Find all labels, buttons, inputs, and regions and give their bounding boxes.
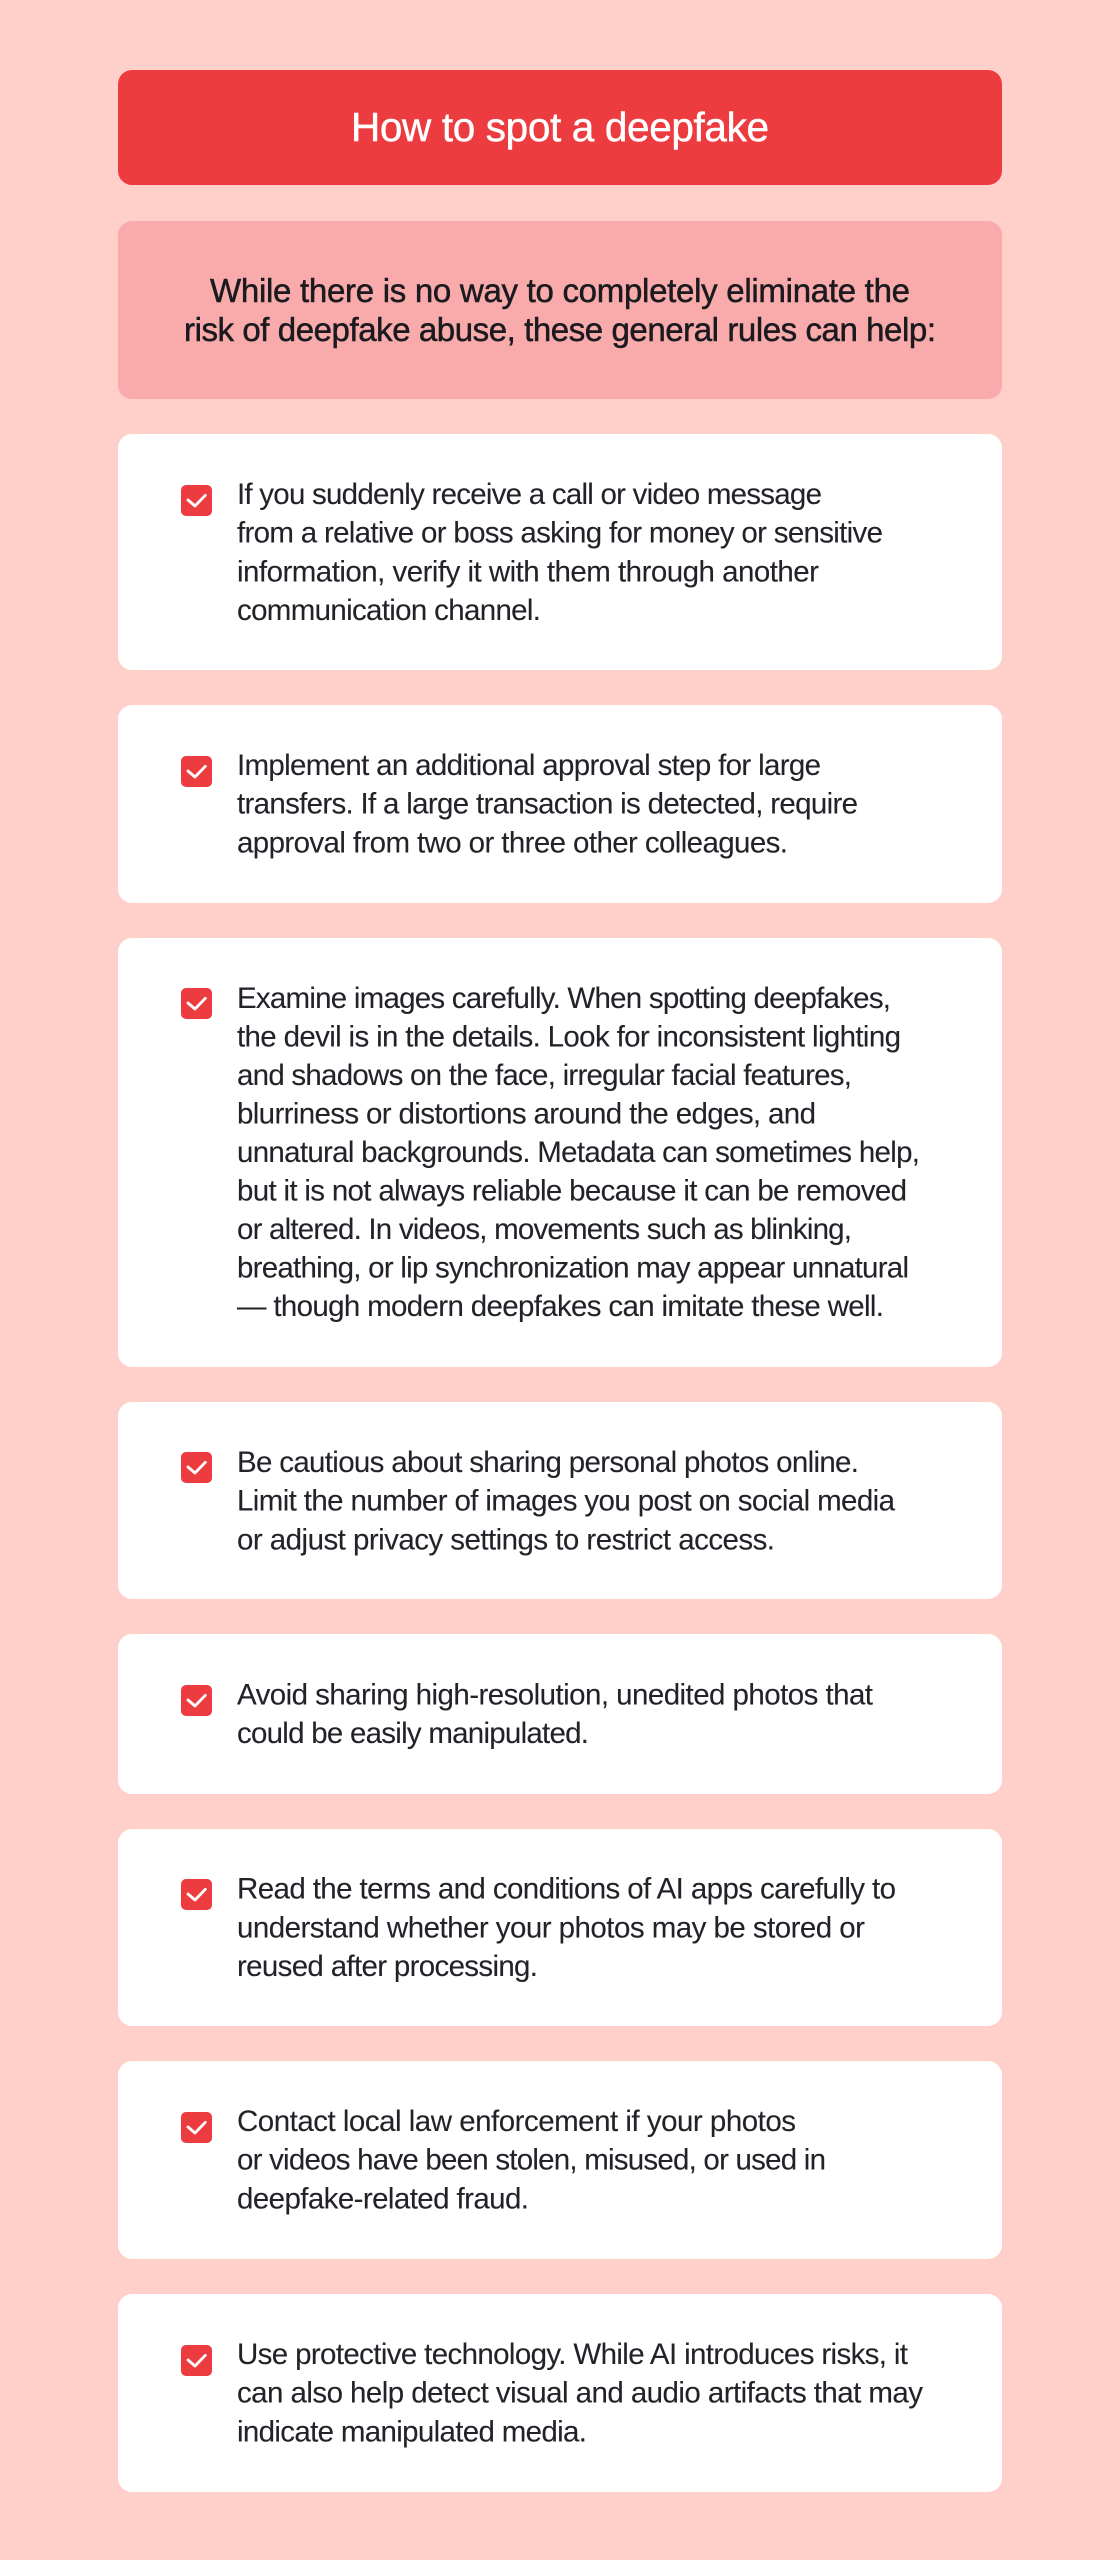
card 4: sharing photos: [118, 1402, 1002, 1599]
card 8 text: [237, 2338, 923, 2448]
card 3 text: and shadows on the face, irregular facial features,: [237, 1059, 852, 1092]
card 4 text: or adjust privacy settings to restrict access.: [237, 1523, 775, 1556]
icon: checkbox: [181, 2112, 212, 2143]
card 8 text: indicate manipulated media.: [237, 2415, 587, 2448]
card 8 text: can also help detect visual and audio artifacts that may: [237, 2377, 923, 2410]
card 1 text: [237, 478, 883, 627]
intro panel: While there is no way to completely eliminate the: [210, 272, 910, 309]
card 2 text: approval from two or three other colleagues.: [237, 826, 788, 859]
card 3 text: the devil is in the details. Look for inconsistent lighting: [237, 1020, 901, 1054]
card 1 text: communication channel.: [237, 594, 541, 627]
card 8: protective technology: [118, 2294, 1002, 2492]
card 5: high-resolution photos: [118, 1634, 1002, 1794]
card 5 text: could be easily manipulated.: [237, 1717, 589, 1750]
card 2 text: [237, 749, 858, 859]
card 3 text: — though modern deepfakes can imitate these well.: [237, 1290, 884, 1323]
card 7 text: Contact local law enforcement if your photos: [237, 2105, 796, 2138]
card 3 text: blurriness or distortions around the edges, and: [237, 1098, 816, 1130]
card 1 text: If you suddenly receive a call or video message: [237, 478, 822, 511]
card 3 text: breathing, or lip synchronization may appear unnatural: [237, 1252, 909, 1284]
title banner: How to spot a deepfake: [351, 104, 769, 150]
icon: checkbox: [181, 988, 212, 1019]
title banner: [118, 70, 1002, 185]
card 6: terms and conditions: [118, 1829, 1002, 2026]
card 3 text: but it is not always reliable because it can be removed: [237, 1174, 907, 1208]
card 3 text: Examine images carefully. When spotting deepfakes,: [237, 982, 891, 1015]
icon: checkbox: [181, 485, 212, 516]
card 4 text: Limit the number of images you post on social media: [237, 1485, 896, 1518]
icon: checkbox: [181, 2345, 212, 2376]
card 1 text: from a relative or boss asking for money or sensitive: [237, 517, 883, 550]
card 2 text: Implement an additional approval step for large: [237, 749, 821, 782]
card 7 text: or videos have been stolen, misused, or used in: [237, 2144, 826, 2177]
card 2 text: transfers. If a large transaction is detected, require: [237, 788, 858, 821]
card 3: examine images: [118, 938, 1002, 1367]
card 3 text: unnatural backgrounds. Metadata can sometimes help,: [237, 1136, 920, 1169]
card 6 text: [237, 1873, 896, 1983]
icon: checkbox: [181, 756, 212, 787]
icon: checkbox: [181, 1879, 212, 1910]
card 5 text: [237, 1678, 873, 1750]
card 1: verify calls: [118, 434, 1002, 670]
card 4 text: [237, 1446, 896, 1556]
card 3 text: [237, 982, 920, 1323]
card 8 text: Use protective technology. While AI introduces risks, it: [237, 2338, 908, 2371]
card 4 text: Be cautious about sharing personal photos online.: [237, 1446, 859, 1479]
card 3 text: or altered. In videos, movements such as blinking,: [237, 1213, 852, 1246]
card 7: law enforcement: [118, 2061, 1002, 2259]
card 6 text: reused after processing.: [237, 1950, 538, 1983]
card 6 text: understand whether your photos may be stored or: [237, 1911, 865, 1944]
card 7 text: deepfake-related fraud.: [237, 2182, 529, 2215]
card 1 text: information, verify it with them through another: [237, 555, 819, 588]
icon: checkbox: [181, 1452, 212, 1483]
icon: checkbox: [181, 1685, 212, 1716]
card 2: approval step: [118, 705, 1002, 903]
intro panel: risk of deepfake abuse, these general rules can help:: [184, 311, 936, 348]
intro panel: [118, 221, 1002, 399]
card 5 text: Avoid sharing high-resolution, unedited photos that: [237, 1678, 873, 1712]
card 7 text: [237, 2105, 826, 2215]
card 6 text: Read the terms and conditions of AI apps carefully to: [237, 1873, 896, 1906]
